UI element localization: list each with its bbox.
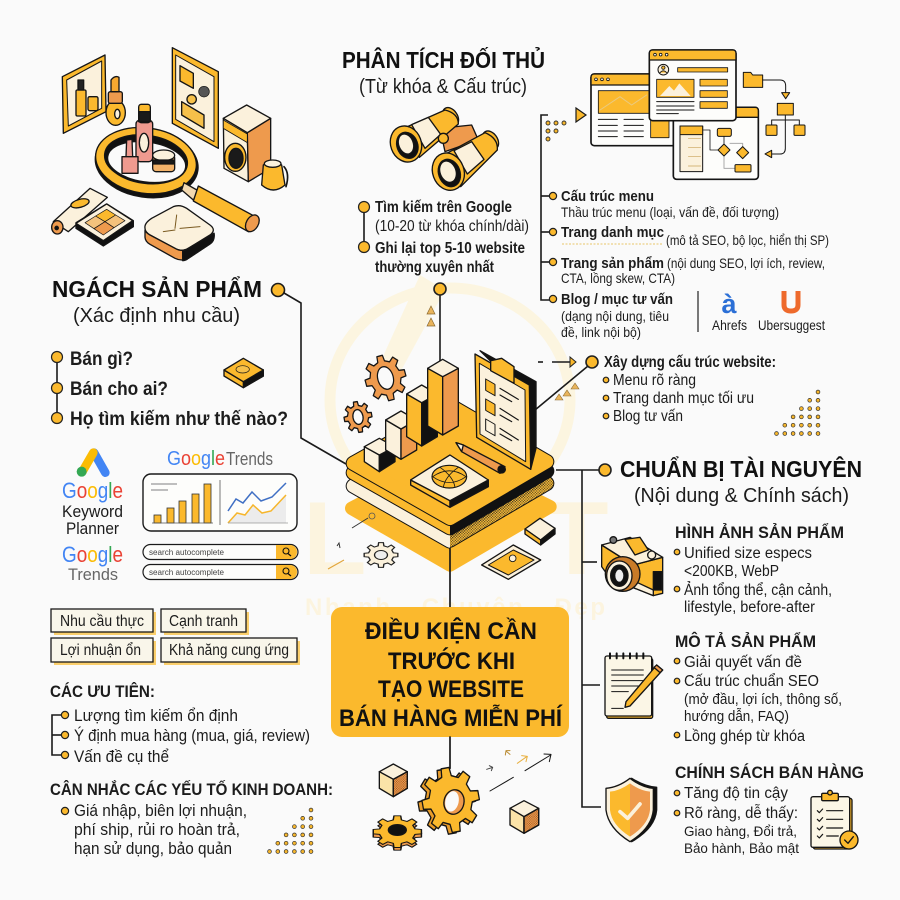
list: sales policy: CHÍNH SÁCH BÁN HÀNG — [675, 763, 864, 782]
block: build website structure: Trang danh mục tối ưu — [613, 390, 754, 407]
list: product images — [674, 523, 844, 616]
heading: product niche: (Xác định nhu cầu) — [73, 305, 240, 327]
heading: prepare resources — [599, 455, 862, 507]
list: business factors: hạn sử dụng, bảo quản — [74, 840, 232, 858]
list: niche questions: Bán gì? — [70, 349, 133, 370]
list: priorities: CÁC ƯU TIÊN: — [50, 682, 155, 701]
list: Google research steps: thường xuyên nhất — [375, 259, 495, 276]
list: business factors: CÂN NHẮC CÁC YẾU TỐ KINH DOANH: — [50, 779, 333, 799]
connector lines — [284, 115, 601, 807]
main title card — [331, 607, 569, 737]
main title card: ĐIỀU KIỆN CẦN — [365, 617, 537, 645]
list: product images: Unified size especs — [684, 545, 812, 562]
decorative dot triangle bottom left — [268, 808, 313, 853]
list: priorities — [50, 682, 310, 766]
illustration: product niche magnifier — [52, 48, 288, 261]
tools: Ahrefs and Ubersuggest — [698, 289, 825, 333]
block: build website structure: Blog tư vấn — [613, 408, 683, 425]
icon: gears beside bars — [342, 351, 411, 435]
block: build website structure — [538, 354, 776, 425]
list: competitor page structure: CTA, lồng skew, CTA) — [561, 270, 675, 286]
tool: Google Trends small logo: Trends — [68, 565, 118, 584]
tags: selection criteria: Nhu cầu thực — [60, 613, 144, 630]
tool: Google Keyword Planner: Google — [62, 478, 123, 503]
heading: competitor analysis — [342, 45, 545, 98]
list: sales policy: Giao hàng, Đổi trả, — [684, 823, 797, 839]
main title card: TRƯỚC KHI — [388, 647, 515, 675]
list: product description — [674, 632, 842, 745]
tool: Google Keyword Planner — [62, 478, 123, 538]
tools: Ahrefs and Ubersuggest: Ahrefs — [712, 317, 747, 333]
list: business factors — [50, 779, 333, 858]
list: product description: Lồng ghép từ khóa — [684, 728, 805, 745]
list: product images: <200KB, WebP — [684, 563, 779, 580]
watermark logo: L — [303, 481, 367, 597]
heading: product niche: NGÁCH SẢN PHẨM — [52, 274, 262, 302]
list: product images: HÌNH ẢNH SẢN PHẨM — [675, 523, 844, 542]
list: sales policy — [674, 763, 864, 856]
heading: competitor analysis: PHÂN TÍCH ĐỐI THỦ — [342, 45, 545, 73]
tags: selection criteria: Khả năng cung ứng — [169, 642, 289, 659]
list: Google research steps: Ghi lại top 5-10 website — [375, 240, 525, 257]
main title card: BÁN HÀNG MIỄN PHÍ — [339, 703, 563, 732]
list: competitor page structure: Trang danh mục — [561, 224, 664, 241]
icon: shield — [606, 778, 657, 842]
list: product description: hướng dẫn, FAQ) — [684, 708, 789, 725]
illustration: website windows and sitemap — [591, 50, 805, 179]
tool: Google Trends chart card: Trends — [226, 449, 273, 469]
tool: Google Trends chart card: Google — [167, 448, 225, 470]
list: sales policy: Tăng độ tin cậy — [684, 785, 788, 802]
watermark logo: Nhanh - Chuyên - Đẹp — [305, 594, 605, 621]
list: sales policy: Bảo hành, Bảo mật — [684, 840, 799, 856]
decorative dot triangle right — [775, 390, 820, 435]
icon: camera — [602, 537, 663, 596]
list: business factors: Giá nhập, biên lợi nhuận, — [74, 802, 247, 820]
icon: binoculars — [385, 105, 502, 195]
list: product images: Ảnh tổng thể, cận cảnh, — [684, 582, 832, 599]
heading: prepare resources: (Nội dung & Chính sách) — [634, 485, 849, 507]
icon: notebook and pen — [605, 653, 663, 718]
node and chevrons: competitor connector — [427, 283, 446, 326]
watermark logo: T — [545, 481, 609, 597]
arrow to website illustration — [546, 108, 586, 141]
heading: product niche — [52, 274, 284, 327]
list: sales policy: Rõ ràng, dễ thấy: — [684, 805, 798, 822]
tool: Google Keyword Planner: Planner — [66, 520, 119, 538]
list: competitor page structure: Trang sản phẩm — [561, 255, 664, 272]
list: competitor page structure: (nội dung SEO, lợi ích, review, — [667, 255, 825, 271]
list: Google research steps — [358, 199, 529, 276]
list: product description: Giải quyết vấn đề — [684, 654, 802, 671]
search bars: autocomplete: search autocomplete — [149, 547, 224, 557]
illustration: gears and cubes below title — [373, 737, 551, 850]
list: competitor page structure: Cấu trúc menu — [561, 188, 654, 205]
icon: Google Ads logo — [77, 453, 105, 477]
icon: policy checklist — [811, 790, 858, 849]
illustration: central isometric platform — [352, 351, 550, 610]
list: Google research steps: Tìm kiếm trên Google — [375, 199, 512, 216]
list: niche questions — [52, 349, 288, 430]
tools: Ahrefs and Ubersuggest: Ubersuggest — [758, 317, 825, 333]
small decorations under platform left — [328, 513, 398, 569]
list: competitor page structure: (mô tả SEO, bộ lọc, hiển thị SP) — [666, 232, 829, 248]
list: Google research steps: (10-20 từ khóa chính/dài) — [375, 218, 529, 235]
small decorations under platform right — [482, 518, 555, 579]
block: build website structure: Xây dựng cấu trúc website: — [604, 354, 776, 371]
list: product description: MÔ TẢ SẢN PHẨM — [675, 632, 816, 651]
list: product description: Cấu trúc chuẩn SEO — [684, 673, 819, 690]
list: priorities: Ý định mua hàng (mua, giá, review) — [74, 726, 310, 745]
icon: small product chip — [224, 358, 263, 388]
list: niche questions: Bán cho ai? — [70, 379, 168, 400]
search bars: autocomplete — [143, 544, 298, 580]
search bars: autocomplete: search autocomplete — [149, 567, 224, 577]
list: competitor page structure: (dạng nội dung, tiêu — [561, 308, 669, 324]
list: competitor page structure — [549, 188, 829, 340]
list: product images: lifestyle, before-after — [684, 599, 815, 616]
list: competitor page structure: đề, link nội bộ) — [561, 324, 641, 340]
list: product description: (mở đầu, lợi ích, thông số, — [684, 692, 842, 708]
tool: Google Trends small logo: Google — [62, 542, 123, 567]
tools: Ahrefs and Ubersuggest: à — [721, 289, 737, 319]
heading: competitor analysis: (Từ khóa & Cấu trúc) — [359, 76, 527, 98]
list: competitor page structure: Blog / mục tư vấn — [561, 291, 673, 308]
tags: selection criteria: Cạnh tranh — [169, 613, 238, 630]
watermark logo — [303, 275, 609, 621]
tool: Google Trends chart card — [143, 448, 297, 531]
list: competitor page structure: Thầu trúc menu (loại, vấn đề, đối tượng) — [561, 204, 779, 220]
tags: selection criteria: Lợi nhuận ổn — [60, 642, 141, 659]
list: niche questions: Họ tìm kiếm như thế nào? — [70, 409, 288, 430]
main title card: TẠO WEBSITE — [378, 676, 524, 703]
list: business factors: phí ship, rủi ro hoàn trả, — [74, 821, 240, 839]
heading: prepare resources: CHUẨN BỊ TÀI NGUYÊN — [620, 455, 862, 482]
tags: selection criteria — [51, 609, 300, 665]
list: priorities: Vấn đề cụ thể — [74, 748, 169, 766]
tool: Google Trends small logo — [62, 542, 123, 584]
block: build website structure: Menu rõ ràng — [613, 372, 696, 389]
tool: Google Keyword Planner: Keyword — [62, 503, 123, 521]
list: priorities: Lượng tìm kiếm ổn định — [74, 707, 238, 725]
